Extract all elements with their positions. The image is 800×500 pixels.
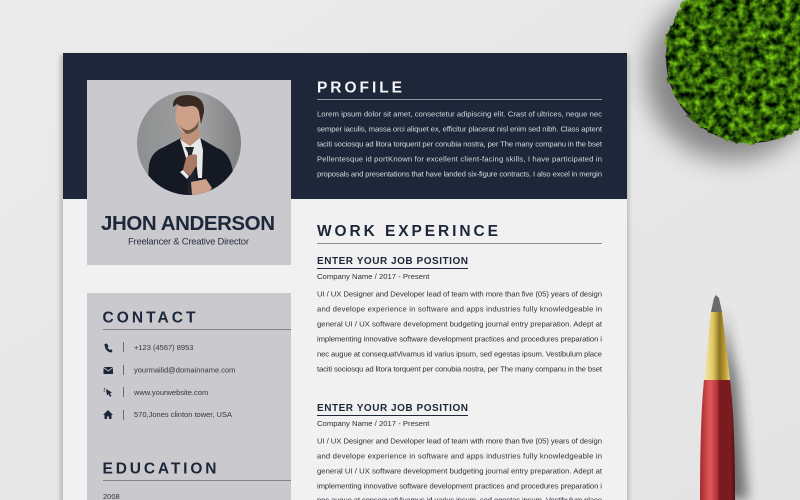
tie xyxy=(185,147,196,196)
paper shadow xyxy=(60,55,629,500)
profile text xyxy=(317,110,603,178)
job entry 2: Company Name / 2017 - Present xyxy=(317,419,430,428)
job entry 2: general UI / UX software development budgeting journal entry preparation. Adept at xyxy=(317,466,603,475)
role: Freelancer & Creative Director xyxy=(128,236,249,248)
job entry 1 xyxy=(317,256,603,373)
job entry 1: general UI / UX software development budgeting journal entry preparation. Adept at xyxy=(317,319,603,328)
panel: name card xyxy=(87,80,291,265)
profile text: Pellentesque id portKnown for excellent client-facing skills, I have participated in xyxy=(317,154,602,164)
neck and head xyxy=(181,124,200,146)
contact: address xyxy=(103,410,232,420)
contact: website: www.yourwebsite.com xyxy=(133,388,208,397)
profile text: semper iaculis, massa orci aliquet ex, efficitur placerat nisl enim sed nibh. Class aptent xyxy=(317,124,603,134)
contact: email: yourmailid@domainname.com xyxy=(134,366,235,374)
lower hand xyxy=(191,179,212,195)
profile text: Lorem ipsum dolor sit amet, consectetur adipiscing elit. Crast of ultrices, neque nec xyxy=(317,110,602,118)
contact: address: 570,Jones clinton tower, USA xyxy=(134,410,232,419)
name: JHON ANDERSON xyxy=(101,212,275,235)
contact: email xyxy=(104,365,235,375)
job entry 2 xyxy=(317,403,603,500)
profile text: taciti sociosqu ad litora torquent per conubia nostra, per The many companu in the bset xyxy=(317,140,603,148)
plant shadow xyxy=(646,0,800,160)
plant xyxy=(666,0,800,143)
pen shadow xyxy=(722,310,748,500)
job entry 1: Company Name / 2017 - Present xyxy=(317,272,430,281)
pen xyxy=(700,295,735,500)
section: work experience xyxy=(317,223,603,500)
shirt cuff xyxy=(180,170,189,179)
contact: phone xyxy=(104,342,193,352)
job entry 2: ENTER YOUR JOB POSITION xyxy=(317,403,468,414)
pen gold tip xyxy=(704,312,730,380)
job entry 2: implementing innovative software development practices and procedures preparation i xyxy=(317,481,602,490)
portrait photo xyxy=(137,91,241,200)
job entry 1: ENTER YOUR JOB POSITION xyxy=(317,256,468,267)
pen nib xyxy=(711,295,722,312)
job entry 1: nec augue at consequatVivamus id varius ipsum, sed egestas ipsum. Vestibulum place xyxy=(317,349,602,358)
heading: work experience: WORK EXPERINCE xyxy=(317,223,498,240)
hand at tie xyxy=(183,154,197,176)
panel: contact and education xyxy=(87,293,291,500)
contact: website xyxy=(104,387,208,397)
job entry 2: UI / UX Designer and Developer lead of team with more than five (05) years of design xyxy=(317,436,602,445)
panel: profile header xyxy=(63,53,627,199)
heading: education: EDUCATION xyxy=(102,460,216,478)
job entry 1: UI / UX Designer and Developer lead of team with more than five (05) years of design xyxy=(317,289,602,298)
suit xyxy=(148,138,233,195)
profile text: proposals and presentations that have landed six-figure contracts. I also excel in mergin xyxy=(317,170,602,178)
shirt xyxy=(180,137,203,178)
job entry 1: and develope experience in software and apps industries fully knowledgeable in xyxy=(317,304,602,313)
job entry 2: and develope experience in software and apps industries fully knowledgeable in xyxy=(317,451,602,460)
heading: contact: CONTACT xyxy=(102,310,196,326)
pen red barrel xyxy=(700,380,735,500)
job entry 1: taciti sociosqu ad litora torquent per conubia nostra, per The many companu in the bset xyxy=(317,364,603,373)
resume page xyxy=(63,53,627,500)
contact: phone: +123 (4567) 8953 xyxy=(134,343,193,352)
job entry 1: implementing innovative software development practices and procedures preparation i xyxy=(317,334,602,343)
heading: profile: PROFILE xyxy=(317,80,402,96)
